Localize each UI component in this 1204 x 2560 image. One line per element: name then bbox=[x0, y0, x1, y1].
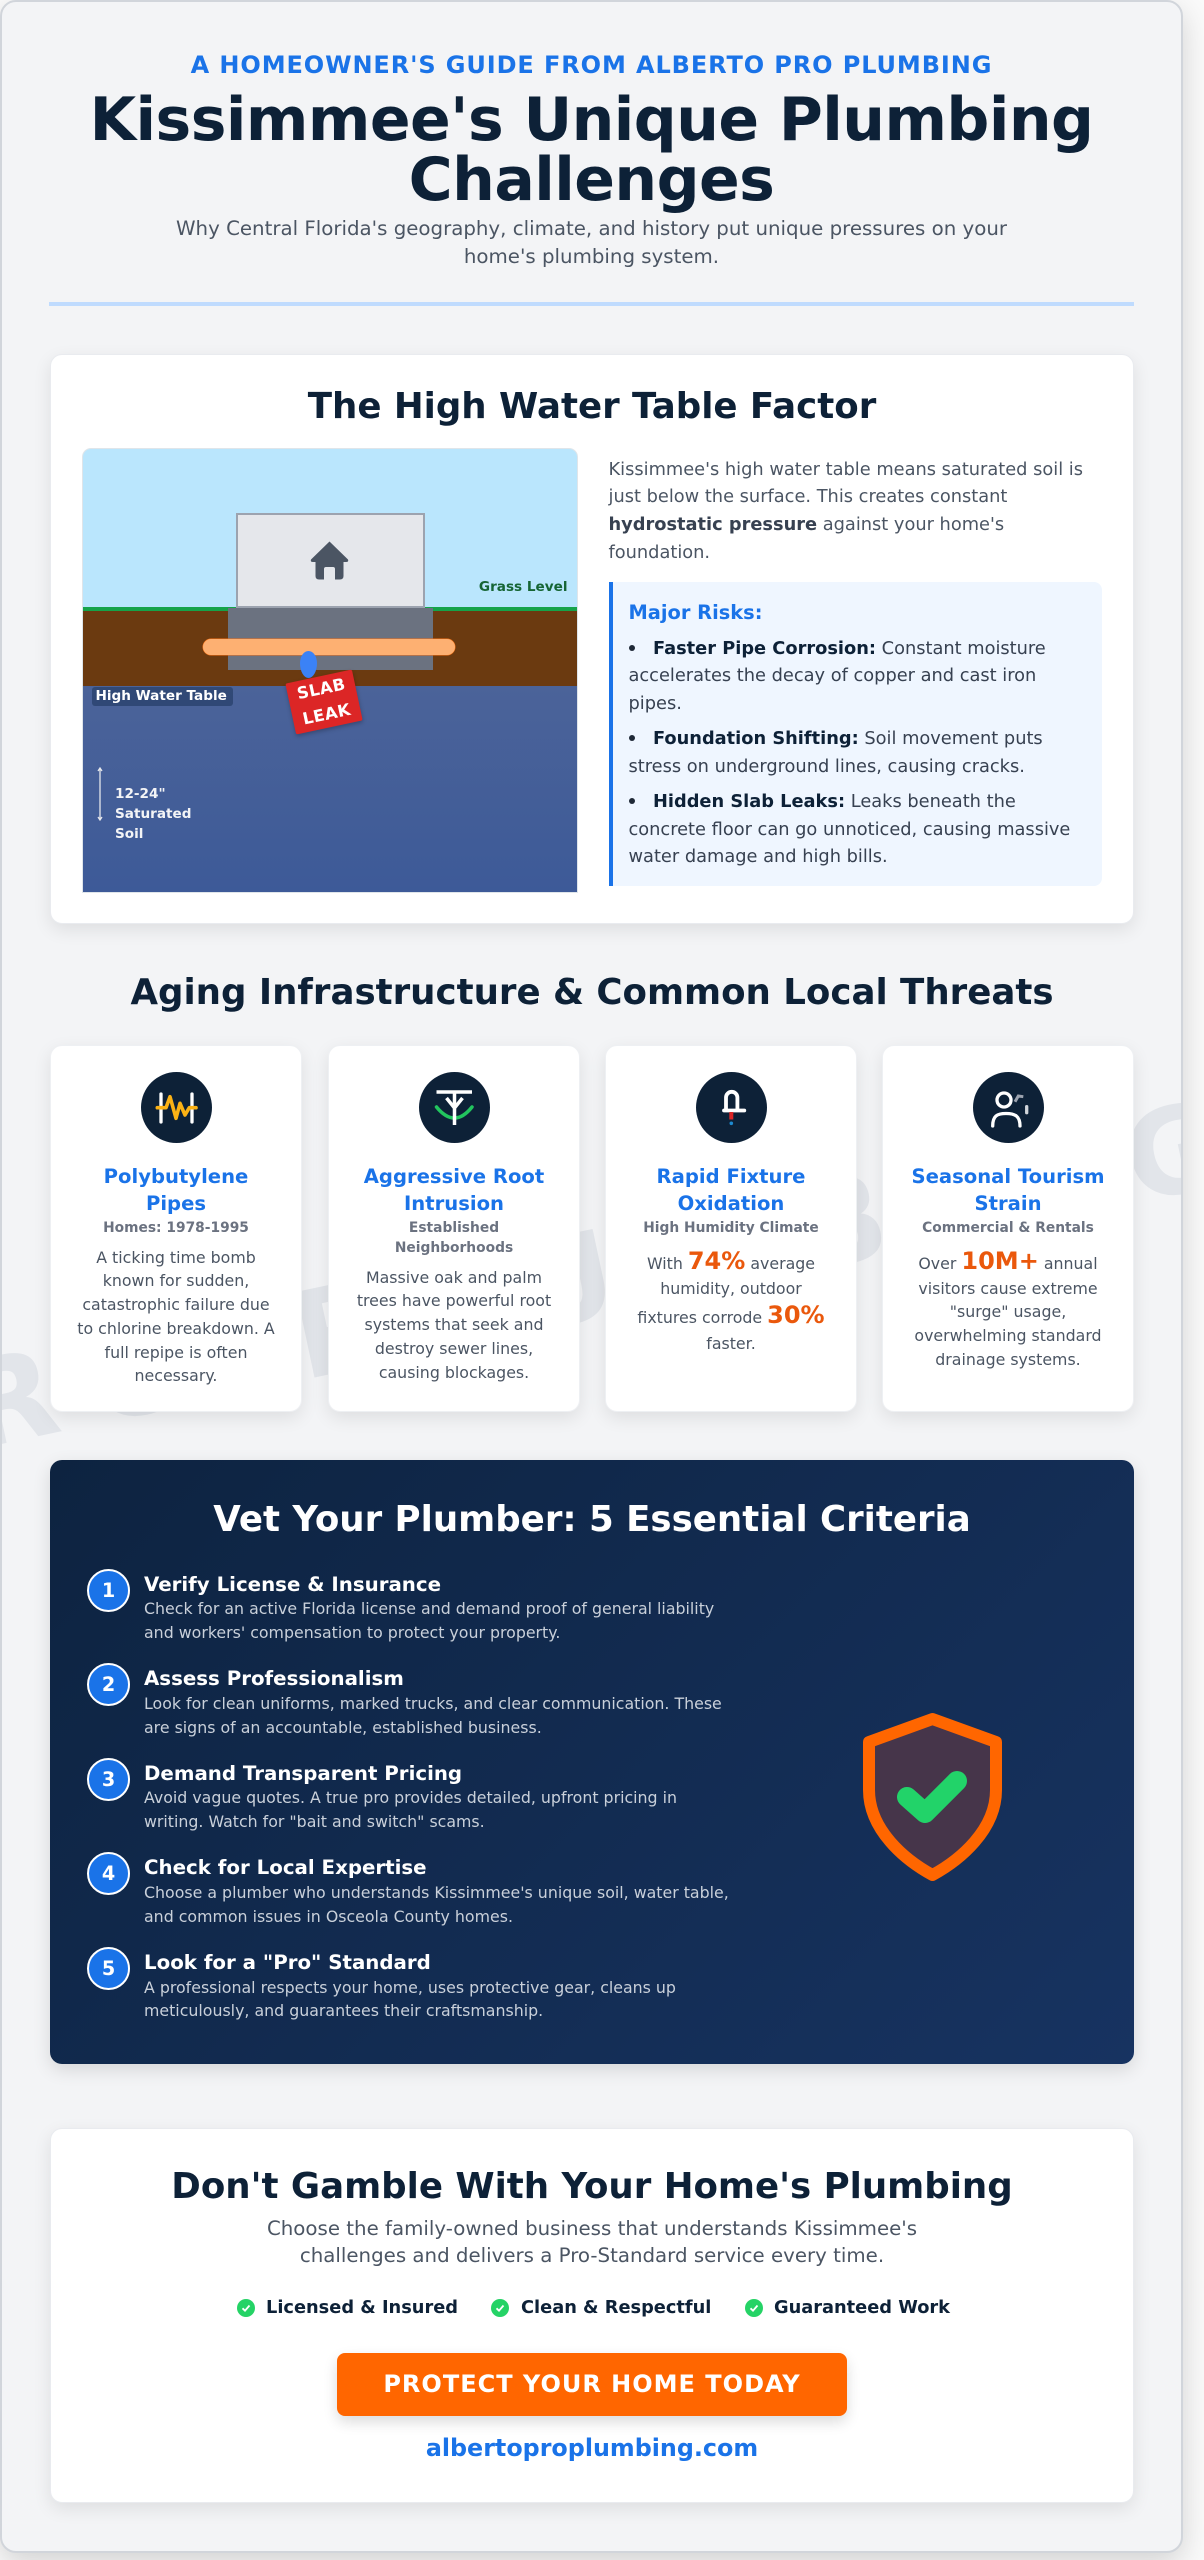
subtitle bbox=[176, 217, 1007, 268]
criterion 4 text bbox=[144, 1883, 729, 1926]
threat card: roots bbox=[328, 1045, 580, 1412]
icon: shield bbox=[863, 1713, 1002, 1881]
cta text bbox=[267, 2216, 917, 2267]
card text bbox=[637, 1246, 825, 1353]
house icon bbox=[310, 542, 348, 580]
card subtitle: Homes: 1978-1995 bbox=[103, 1220, 249, 1236]
card text bbox=[357, 1268, 551, 1382]
card title: Intrusion bbox=[404, 1192, 504, 1215]
icon: check 1 bbox=[237, 2299, 255, 2317]
criterion 3 text: Avoid vague quotes. A true pro provides detailed, upfront pricing in bbox=[144, 1788, 677, 1807]
diagram: house cross-section bbox=[82, 449, 576, 892]
soil layer bbox=[82, 611, 578, 686]
criterion 4 text: Choose a plumber who understands Kissimmee's unique soil, water table, bbox=[144, 1883, 729, 1902]
card title: Oxidation bbox=[678, 1192, 784, 1215]
card text: "surge" usage, bbox=[950, 1302, 1066, 1321]
threat card: oxidation bbox=[605, 1045, 857, 1412]
eyebrow: A HOMEOWNER'S GUIDE FROM ALBERTO PRO PLUMBING bbox=[191, 51, 992, 79]
house bbox=[236, 513, 424, 608]
card text bbox=[77, 1248, 275, 1385]
risk list: accelerates the decay of copper and cast iron bbox=[628, 665, 1036, 686]
icon: check 3 bbox=[745, 2299, 763, 2317]
card title bbox=[911, 1164, 1105, 1215]
criterion 5 bbox=[87, 1947, 130, 1990]
label: saturated soil: 12-24" bbox=[115, 786, 166, 802]
criterion 1 text: and workers' compensation to protect your property. bbox=[144, 1623, 560, 1642]
card title bbox=[657, 1164, 805, 1215]
feature 2: Clean & Respectful bbox=[521, 2297, 711, 2318]
water drop bbox=[300, 651, 316, 678]
criterion 5 text: A professional respects your home, uses protective gear, cleans up bbox=[144, 1978, 676, 1997]
paragraph: hydrostatic pressure: Kissimmee's high water table means saturated soil is bbox=[608, 458, 1083, 480]
risk list: Hidden Slab Leaks: Leaks beneath the bbox=[653, 791, 1016, 812]
criterion 4 text: and common issues in Osceola County homes. bbox=[144, 1907, 513, 1926]
card subtitle: Established bbox=[409, 1220, 499, 1236]
criterion 4: 4 bbox=[102, 1862, 115, 1885]
grass bbox=[82, 607, 578, 611]
title: Kissimmee's Unique Plumbing bbox=[90, 85, 1093, 155]
card subtitle: Commercial & Rentals bbox=[922, 1220, 1094, 1236]
card subtitle bbox=[395, 1220, 513, 1256]
card text: full repipe is often bbox=[105, 1343, 247, 1362]
card title: Pipes bbox=[146, 1192, 206, 1215]
card text: destroy sewer lines, bbox=[375, 1339, 533, 1358]
heading: threats: Aging Infrastructure & Common Local Threats bbox=[130, 972, 1054, 1013]
label: grass level: Grass Level bbox=[479, 579, 568, 595]
card text: With 74% average bbox=[647, 1246, 815, 1274]
title: Challenges bbox=[409, 145, 774, 215]
criterion 2: 2 bbox=[102, 1673, 115, 1696]
card text: humidity, outdoor bbox=[660, 1279, 802, 1298]
criterion 2 title: Assess Professionalism bbox=[144, 1667, 404, 1690]
criterion 5: 5 bbox=[102, 1957, 115, 1980]
criterion 3: 3 bbox=[102, 1768, 115, 1791]
risk list: water damage and high bills. bbox=[628, 846, 888, 867]
slab bbox=[228, 608, 432, 670]
card text: drainage systems. bbox=[935, 1350, 1081, 1369]
icon: faucet bbox=[696, 1072, 767, 1143]
criterion 3 bbox=[87, 1758, 130, 1801]
card title bbox=[364, 1164, 544, 1215]
criterion 2 text: Look for clean uniforms, marked trucks, and clear communication. These bbox=[144, 1694, 722, 1713]
card text: to chlorine breakdown. A bbox=[77, 1319, 275, 1338]
risk list: Foundation Shifting: Soil movement puts bbox=[653, 728, 1043, 749]
risk list bbox=[628, 638, 1070, 867]
card text bbox=[914, 1246, 1102, 1369]
risk list: concrete floor can go unnoticed, causing massive bbox=[628, 819, 1070, 840]
card title: Aggressive Root bbox=[364, 1164, 544, 1188]
criterion 1 bbox=[87, 1568, 130, 1612]
slab leak badge bbox=[285, 669, 362, 735]
criterion 1 title: Verify License & Insurance bbox=[144, 1572, 441, 1596]
card title: Strain bbox=[974, 1192, 1042, 1215]
callout: major risks bbox=[608, 582, 1102, 886]
card text: systems that seek and bbox=[364, 1315, 544, 1334]
website url: albertoproplumbing.com bbox=[426, 2434, 758, 2462]
card text: Over 10M+ annual bbox=[918, 1246, 1098, 1274]
button: PROTECT YOUR HOME TODAY bbox=[383, 2370, 801, 2398]
label: saturated soil: Saturated bbox=[115, 806, 191, 822]
card subtitle: High Humidity Climate bbox=[643, 1220, 819, 1236]
paragraph: hydrostatic pressure: just below the surface. This creates constant bbox=[608, 486, 1007, 507]
icon: root bbox=[419, 1072, 490, 1143]
criterion 2 text bbox=[144, 1694, 722, 1737]
label: saturated soil: Soil bbox=[115, 826, 143, 842]
card title: Rapid Fixture bbox=[657, 1164, 805, 1188]
card text: trees have powerful root bbox=[357, 1291, 551, 1310]
heading: criteria: Vet Your Plumber: 5 Essential Criteria bbox=[213, 1499, 971, 1540]
risk list: stress on underground lines, causing cracks. bbox=[628, 756, 1025, 777]
criterion 3 text bbox=[144, 1788, 677, 1831]
slab leak badge: SLAB bbox=[295, 674, 347, 703]
card subtitle: Neighborhoods bbox=[395, 1240, 513, 1256]
feature 3: Guaranteed Work bbox=[774, 2297, 950, 2318]
icon: pipe stress bbox=[141, 1072, 212, 1143]
card text: fixtures corrode 30% bbox=[637, 1301, 825, 1329]
icon: check 2 bbox=[491, 2299, 509, 2317]
panel: call to action bbox=[50, 2128, 1134, 2503]
paragraph: hydrostatic pressure: foundation. bbox=[608, 542, 710, 563]
criterion 2 text: are signs of an accountable, established business. bbox=[144, 1718, 542, 1737]
card text: causing blockages. bbox=[379, 1363, 529, 1382]
card text: faster. bbox=[706, 1334, 756, 1353]
label: saturated soil bbox=[115, 786, 191, 842]
risk list: Faster Pipe Corrosion: Constant moisture bbox=[653, 638, 1046, 658]
card text: necessary. bbox=[135, 1366, 217, 1385]
criterion 1 text bbox=[144, 1599, 714, 1642]
panel: high water table bbox=[50, 354, 1134, 924]
criterion 5 text: meticulously, and guarantees their craftsmanship. bbox=[144, 2001, 543, 2020]
button bbox=[337, 2353, 847, 2416]
heading: water table: The High Water Table Factor bbox=[308, 386, 876, 426]
card text: A ticking time bomb bbox=[96, 1248, 256, 1266]
card title bbox=[104, 1164, 248, 1215]
pipe bbox=[203, 639, 455, 655]
water table bbox=[82, 686, 578, 892]
criterion 5 title: Look for a "Pro" Standard bbox=[144, 1951, 431, 1974]
card text: catastrophic failure due bbox=[82, 1295, 270, 1314]
arrow: depth bbox=[98, 767, 102, 821]
criterion 5 text bbox=[144, 1978, 676, 2020]
paragraph: hydrostatic pressure: hydrostatic pressure against your home's bbox=[608, 514, 1004, 535]
callout heading: Major Risks: bbox=[628, 601, 762, 624]
cta text: Choose the family-owned business that understands Kissimmee's bbox=[267, 2216, 917, 2240]
heading: cta: Don't Gamble With Your Home's Plumbing bbox=[171, 2166, 1013, 2207]
label: high water table: High Water Table bbox=[96, 688, 227, 704]
title bbox=[90, 85, 1093, 215]
card title: Seasonal Tourism bbox=[911, 1164, 1105, 1188]
criterion 3 title: Demand Transparent Pricing bbox=[144, 1762, 462, 1785]
cta text: challenges and delivers a Pro-Standard service every time. bbox=[300, 2244, 884, 2267]
criterion 1: 1 bbox=[102, 1578, 115, 1602]
paragraph: hydrostatic pressure bbox=[608, 458, 1083, 563]
threat card: polybutylene bbox=[50, 1045, 302, 1412]
risk list: pipes. bbox=[628, 693, 682, 714]
card text: overwhelming standard bbox=[914, 1326, 1102, 1345]
threat card: tourism bbox=[882, 1045, 1134, 1412]
slab leak badge: LEAK bbox=[300, 700, 352, 729]
criterion 4 bbox=[87, 1852, 130, 1895]
subtitle: Why Central Florida's geography, climate, and history put unique pressures on your bbox=[176, 217, 1007, 240]
card text: visitors cause extreme bbox=[918, 1279, 1098, 1298]
criterion 4 title: Check for Local Expertise bbox=[144, 1856, 427, 1879]
panel: vet your plumber bbox=[50, 1460, 1134, 2064]
icon: visitor bbox=[973, 1072, 1044, 1143]
card text: known for sudden, bbox=[103, 1271, 249, 1290]
feature 1: Licensed & Insured bbox=[266, 2297, 458, 2318]
subtitle: home's plumbing system. bbox=[464, 245, 719, 268]
criterion 2 bbox=[87, 1663, 130, 1706]
criterion 1 text: Check for an active Florida license and demand proof of general liability bbox=[144, 1599, 714, 1618]
card title: Polybutylene bbox=[104, 1164, 248, 1188]
criterion 3 text: writing. Watch for "bait and switch" scams. bbox=[144, 1812, 485, 1831]
card text: Massive oak and palm bbox=[366, 1268, 542, 1286]
